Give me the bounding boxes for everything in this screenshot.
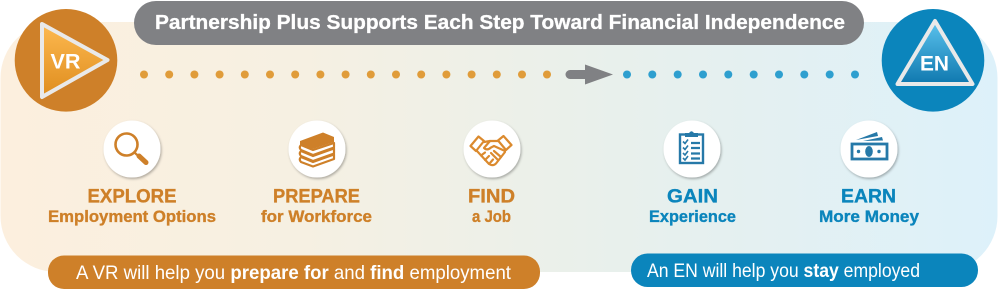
icon: EN badge: EN [920, 52, 949, 76]
icon: clipboard checklist [664, 120, 720, 178]
title banner: Partnership Plus Supports Each Step Toward Financial Independence [155, 11, 845, 34]
heading: EXPLORE: EXPLORE [88, 186, 176, 208]
dotted path: VR stage [140, 70, 551, 78]
callout: VR role: A VR will help you prepare for and find employment [76, 262, 512, 284]
title banner [134, 1, 864, 45]
heading: PREPARE: PREPARE [273, 186, 360, 208]
text: Employment Options: Employment Options [48, 208, 216, 226]
step: prepare [261, 120, 372, 226]
icon: VR badge [15, 9, 117, 112]
arrow: transition from VR to EN [566, 64, 613, 84]
icon: magnifying glass [104, 120, 160, 178]
text: a Job: a Job [472, 208, 511, 226]
text: for Workforce: for Workforce [261, 208, 372, 226]
heading: FIND: FIND [468, 186, 515, 208]
heading: GAIN: GAIN [667, 186, 718, 208]
dotted path: EN stage [623, 70, 859, 78]
heading: EARN: EARN [841, 186, 896, 208]
text: Experience: Experience [649, 208, 736, 226]
icon: money bills [840, 120, 898, 178]
text: More Money: More Money [819, 208, 920, 226]
icon: handshake [464, 120, 520, 178]
callout: EN role: An EN will help you stay employed [647, 260, 920, 282]
step: gain [649, 120, 736, 226]
step: explore [48, 120, 216, 226]
icon: VR badge: VR [50, 50, 80, 74]
icon: EN badge [882, 9, 984, 112]
callout: VR role [48, 256, 540, 289]
step: find [464, 120, 520, 226]
step: earn [819, 120, 920, 226]
callout: EN role [631, 254, 978, 287]
icon: stack of books [288, 120, 346, 178]
